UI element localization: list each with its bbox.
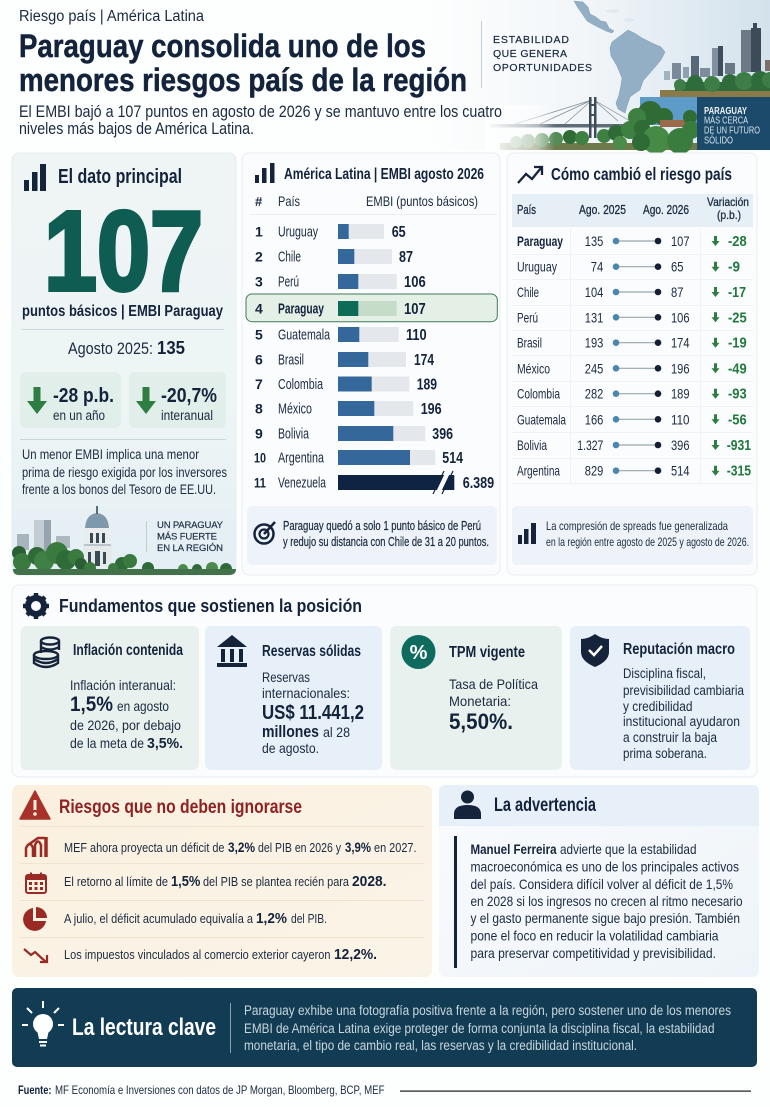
row: Colombia (255, 376, 437, 394)
risk: déficit proyectado: del PIB en 2026 y (258, 840, 341, 855)
row: Perú: Perú (278, 274, 299, 290)
row: Brasil: Brasil (517, 334, 542, 350)
row: Brasil: 6 (255, 352, 263, 368)
card text: en agosto (117, 698, 169, 714)
card heading: Reputación macro (623, 641, 735, 658)
row: Perú: 131 (585, 310, 603, 326)
risk: déficit acumulado: 1,2% (256, 910, 287, 927)
row: Uruguay: -9 (728, 260, 740, 276)
callout: Paraguay más cerca (697, 97, 770, 150)
card text: US$ 11.441,2 (262, 702, 364, 724)
card text (70, 677, 183, 752)
row: Perú: 106 (404, 274, 426, 291)
row: México: México (278, 402, 312, 418)
card text: Monetaria: (449, 693, 511, 709)
panel: ranking EMBI (242, 153, 500, 575)
icon: gear (23, 593, 49, 619)
icon: bank (217, 635, 247, 667)
explanatory text (22, 447, 227, 497)
icon: pie chart (23, 907, 47, 931)
banner heading: La lectura clave (72, 1014, 216, 1041)
card heading: Reservas sólidas (262, 643, 361, 660)
table header: Ago. 2026 (643, 202, 689, 217)
row: Argentina: Argentina (278, 450, 325, 466)
row: Uruguay: Uruguay (278, 224, 319, 240)
previous value: 135 (157, 338, 185, 358)
row: Brasil: -19 (728, 336, 747, 352)
row: Bolivia: Bolivia (278, 426, 310, 442)
row: Chile (255, 248, 413, 266)
icon: percent (402, 635, 436, 669)
row: Argentina: 514 (442, 450, 463, 467)
row: Colombia: 189 (417, 376, 437, 394)
card text (623, 666, 744, 761)
row: Paraguay highlighted: Paraguay (278, 302, 324, 318)
icon: shield (581, 634, 609, 667)
risk: retorno al límite: 2028. (352, 873, 386, 890)
row: Uruguay: Uruguay (517, 258, 557, 274)
stat: -28 p.b.: -28 p.b. (53, 384, 114, 407)
risk: impuestos comercio exterior: 12,2%. (334, 946, 377, 963)
card: TPM vigente (390, 626, 562, 770)
row: Paraguay: 107 (671, 233, 690, 249)
table header: País (278, 193, 300, 209)
row: Paraguay (517, 233, 747, 250)
title (19, 28, 467, 98)
heading: La advertencia (494, 795, 596, 816)
row: Chile: 104 (585, 284, 603, 300)
card text: Disciplina fiscal, (623, 666, 706, 681)
subtitle: El EMBI bajó a 107 puntos en agosto de 2026 y se mantuvo entre los cuatro (19, 103, 502, 121)
stat: -28 p.b. (20, 372, 121, 428)
card text: al 28 (323, 724, 350, 740)
icon: light bulb (22, 1001, 64, 1046)
water (640, 97, 700, 125)
card text: institucional ayudaron (623, 714, 740, 729)
row: Colombia: 282 (585, 386, 603, 402)
header tagline (481, 21, 592, 88)
tagline (146, 520, 224, 554)
row: Brasil: 174 (671, 334, 690, 350)
banner text: EMBI de América Latina exige proteger de forma conjunta la disciplina fiscal, la estabilidad (244, 1021, 714, 1036)
title: menores riesgos país de la región (19, 62, 467, 98)
card heading: Inflación contenida (73, 642, 183, 659)
row: Perú: 3 (255, 274, 263, 290)
row: Guatemala: 110 (671, 412, 690, 428)
row: Paraguay: 135 (585, 233, 603, 249)
callout: Paraguay más cerca: PARAGUAY (704, 106, 747, 117)
row: Colombia: 7 (255, 376, 263, 392)
risk: retorno al límite: del PIB se plantea recién para (203, 874, 350, 889)
icon: percent: % (410, 642, 428, 664)
row: Bolivia: 9 (255, 426, 263, 442)
row: Guatemala: Guatemala (278, 328, 331, 344)
icon: trend arrow (518, 167, 542, 183)
card text: Inflación interanual: (70, 677, 176, 693)
row: Guatemala: 166 (585, 412, 603, 428)
row: Argentina: -315 (727, 464, 751, 480)
card text: Reservas (262, 669, 310, 685)
stat: -20,7% (129, 372, 226, 428)
row: Argentina (517, 462, 751, 480)
icon: coins (34, 638, 59, 667)
icon: rising chart (26, 837, 46, 857)
icon: bars (24, 164, 46, 191)
risk: retorno al límite: 1,5% (171, 873, 200, 890)
row: México: 245 (585, 360, 603, 376)
risk: déficit proyectado: 3,9% (345, 839, 371, 855)
table header: Variación (707, 195, 749, 209)
panel: cómo cambió el riesgo país (507, 153, 757, 575)
row: Brasil (517, 334, 747, 352)
row: Paraguay: Paraguay (517, 233, 563, 249)
row: Paraguay highlighted: 107 (404, 301, 426, 318)
row: Perú: 106 (671, 310, 690, 326)
row: México: México (517, 360, 550, 376)
table header (512, 194, 753, 227)
row: Chile: Chile (278, 250, 301, 266)
number caption: puntos básicos | EMBI Paraguay (22, 303, 223, 320)
left fade (485, 105, 555, 151)
card text: de agosto. (262, 740, 319, 756)
row: Argentina: 10 (254, 450, 266, 466)
row: Chile: Chile (517, 284, 539, 300)
icon: calendar (26, 872, 46, 893)
row: México (517, 360, 747, 378)
card heading: TPM vigente (449, 644, 525, 661)
card text: de la meta de (70, 735, 144, 751)
source footer (18, 1083, 751, 1097)
risk: déficit proyectado (26, 837, 416, 857)
subtitle (19, 103, 502, 138)
row: Paraguay: -28 (728, 234, 747, 250)
big number: 107 (44, 188, 203, 314)
card text: millones (262, 723, 319, 741)
callout: distancia con Perú y Chile: y redujo su distancia con Chile de 31 a 20 puntos. (283, 535, 489, 549)
banner text (244, 1003, 731, 1053)
table header: # (255, 194, 263, 209)
row: Uruguay (255, 224, 406, 241)
banner text: monetaria, el tipo de cambio real, las reservas y la credibilidad institucional. (244, 1038, 637, 1053)
tagline: EN LA REGIÓN (157, 543, 223, 554)
title: Paraguay consolida uno de los (19, 28, 426, 64)
explanatory text: prima de riesgo exigida por los inversores (22, 465, 227, 480)
risk: déficit acumulado: A julio, el déficit acumulado equivalía a (64, 911, 254, 926)
card: reservas sólidas (205, 626, 382, 770)
row: Chile: -17 (728, 285, 746, 301)
quote text: advierte que la estabilidad (560, 841, 696, 857)
row: Uruguay: 65 (671, 258, 684, 274)
row: Uruguay: 65 (392, 224, 406, 241)
quote text (470, 841, 743, 961)
icon: person (454, 790, 481, 819)
card text (262, 669, 364, 756)
row: México (255, 400, 442, 418)
table header: (p.b.) (717, 208, 741, 222)
stat: -20,7%: -20,7% (161, 384, 217, 407)
quote text: del país. Considera difícil volver al déficit de 1,5% (470, 876, 733, 892)
card text: Tasa de Política (449, 676, 538, 692)
previous value: Agosto 2025: (68, 339, 153, 358)
row: Guatemala (255, 326, 427, 344)
risk: déficit proyectado: en 2027. (374, 840, 416, 855)
stat: -28 p.b.: en un año (53, 408, 105, 423)
foreground trees (500, 101, 700, 154)
row: Argentina: 829 (585, 462, 603, 478)
icon: target (254, 522, 275, 544)
explanatory text: Un menor EMBI implica una menor (22, 447, 199, 462)
risk: déficit acumulado: del PIB. (291, 911, 327, 926)
kicker: Riesgo país | América Latina (19, 8, 204, 25)
row: Venezuela with axis break: 6.389 (463, 475, 495, 492)
stat: -20,7%: interanual (161, 408, 213, 423)
heading: Riesgos que no deben ignorarse (59, 797, 302, 818)
icon: warning triangle (20, 791, 50, 819)
tagline: UN PARAGUAY (157, 520, 224, 531)
row: Colombia: Colombia (278, 377, 324, 393)
row: Bolivia: -931 (727, 438, 751, 454)
row: Perú: Perú (517, 310, 538, 326)
tagline: MÁS FUERTE (157, 532, 217, 542)
heading: América Latina | EMBI agosto 2026 (284, 166, 484, 183)
callout: distancia con Perú y Chile (247, 506, 497, 565)
row: México: 196 (421, 401, 442, 418)
panel: el dato principal (12, 153, 236, 575)
row: Perú: -25 (728, 310, 747, 326)
card text (449, 676, 538, 734)
illustration: palacio and trees (12, 506, 236, 575)
card text: previsibilidad cambiaria (623, 683, 744, 698)
row: Guatemala: -56 (728, 412, 747, 428)
row: Guatemala: 5 (255, 326, 263, 342)
row: Guatemala: 110 (406, 327, 427, 344)
callout: distancia con Perú y Chile: Paraguay quedó a solo 1 punto básico de Perú (283, 519, 481, 533)
grid (512, 228, 753, 484)
panel: fundamentos (12, 585, 757, 777)
skyline (664, 23, 770, 80)
risk: déficit acumulado (23, 907, 327, 931)
row: México: -49 (728, 362, 747, 378)
row: Argentina (254, 450, 463, 467)
quote text: Manuel Ferreira (470, 841, 557, 857)
risk: retorno al límite: El retorno al límite de (64, 874, 168, 889)
row: Brasil: Brasil (278, 352, 304, 368)
row: Venezuela with axis break (254, 471, 495, 494)
row: Colombia: Colombia (517, 386, 560, 402)
callout: compresión de spreads (512, 506, 753, 565)
card text: de 2026, por debajo (70, 717, 181, 733)
card text: y credibilidad (623, 699, 692, 714)
row: Bolivia: Bolivia (517, 437, 547, 453)
risk: déficit proyectado: 3,2% (228, 839, 255, 855)
row: Uruguay: 74 (591, 258, 603, 274)
row: Venezuela with axis break: Venezuela (278, 476, 327, 492)
header illustration: map, skyline and bridge (430, 0, 770, 154)
row: Chile: 2 (255, 248, 263, 264)
row: Brasil: 174 (414, 352, 434, 369)
bridge (490, 97, 647, 138)
row: Paraguay highlighted (246, 294, 497, 322)
heading: Fundamentos que sostienen la posición (59, 595, 362, 616)
row: Bolivia: 396 (671, 437, 690, 453)
dumbbell table (512, 228, 753, 484)
heading: El dato principal (58, 165, 182, 188)
row: Perú (517, 310, 747, 326)
header tagline: QUE GENERA (493, 48, 567, 60)
row: Uruguay: 1 (255, 224, 263, 240)
panel: la advertencia (439, 785, 759, 977)
row: Chile (517, 284, 746, 301)
row: Paraguay highlighted: 4 (255, 300, 263, 316)
banner: la lectura clave (12, 988, 757, 1067)
row: Bolivia (255, 426, 453, 443)
card text: 3,5%. (147, 735, 183, 752)
callout: Paraguay más cerca: MÁS CERCA (704, 114, 748, 126)
row: Bolivia: 396 (432, 426, 453, 443)
icon: falling trend (24, 949, 47, 962)
table header: Ago. 2025 (579, 202, 626, 217)
card text: 5,50%. (449, 709, 513, 734)
row: Colombia: 189 (671, 386, 690, 402)
row: Guatemala (517, 412, 747, 428)
row: Chile: 87 (671, 284, 684, 300)
table header: EMBI (puntos básicos) (366, 193, 478, 209)
row: Colombia: -93 (728, 386, 747, 402)
quote text: para preservar competitividad y previsibilidad. (470, 945, 716, 961)
explanatory text: frente a los bonos del Tesoro de EE.UU. (22, 482, 216, 497)
row: Uruguay (517, 258, 740, 276)
header tagline: ESTABILIDAD (493, 34, 569, 46)
icon: map of Latin America (574, 1, 665, 113)
header tagline: OPORTUNIDADES (493, 62, 592, 74)
row: Venezuela with axis break: 11 (254, 474, 266, 490)
row: Chile: 87 (399, 249, 413, 266)
row: Brasil: 193 (585, 334, 603, 350)
row: Brasil (255, 352, 434, 369)
source footer: MF Economía e Inversiones con datos de JP Morgan, Bloomberg, BCP, MEF (55, 1083, 384, 1097)
row: Perú (255, 274, 426, 291)
source footer: Fuente: (18, 1083, 52, 1097)
row: Bolivia: 1.327 (577, 437, 603, 453)
risk: impuestos comercio exterior: Los impuestos vinculados al comercio exterior cayeron (64, 947, 330, 962)
icon: bars (518, 523, 536, 544)
card text: internacionales: (262, 685, 350, 701)
panel: riesgos (12, 785, 432, 977)
subtitle: niveles más bajos de América Latina. (19, 120, 254, 138)
callout: Paraguay más cerca: SÓLIDO (704, 134, 733, 146)
icon: bars (255, 163, 274, 183)
bar chart (246, 224, 497, 494)
card: inflación contenida (20, 626, 199, 770)
table header (250, 193, 497, 215)
far trees and shore (660, 71, 770, 97)
risk: déficit proyectado: MEF ahora proyecta un déficit de (64, 840, 224, 855)
card text: prima soberana. (623, 746, 707, 761)
row: Argentina: 514 (671, 462, 690, 478)
card: reputación macro (570, 626, 750, 770)
risk: retorno al límite (26, 872, 386, 893)
row: México: 196 (671, 360, 690, 376)
row: Colombia (517, 386, 747, 402)
row: México: 8 (255, 400, 263, 416)
table header: País (517, 202, 536, 217)
row: Bolivia (517, 437, 751, 454)
row: Argentina: Argentina (517, 462, 560, 478)
quote text: pone el foco en reducir la volatilidad cambiaria (470, 928, 719, 944)
row: Guatemala: Guatemala (517, 412, 566, 428)
card text: a construir la baja (623, 730, 717, 745)
card text: 1,5% (70, 693, 113, 716)
